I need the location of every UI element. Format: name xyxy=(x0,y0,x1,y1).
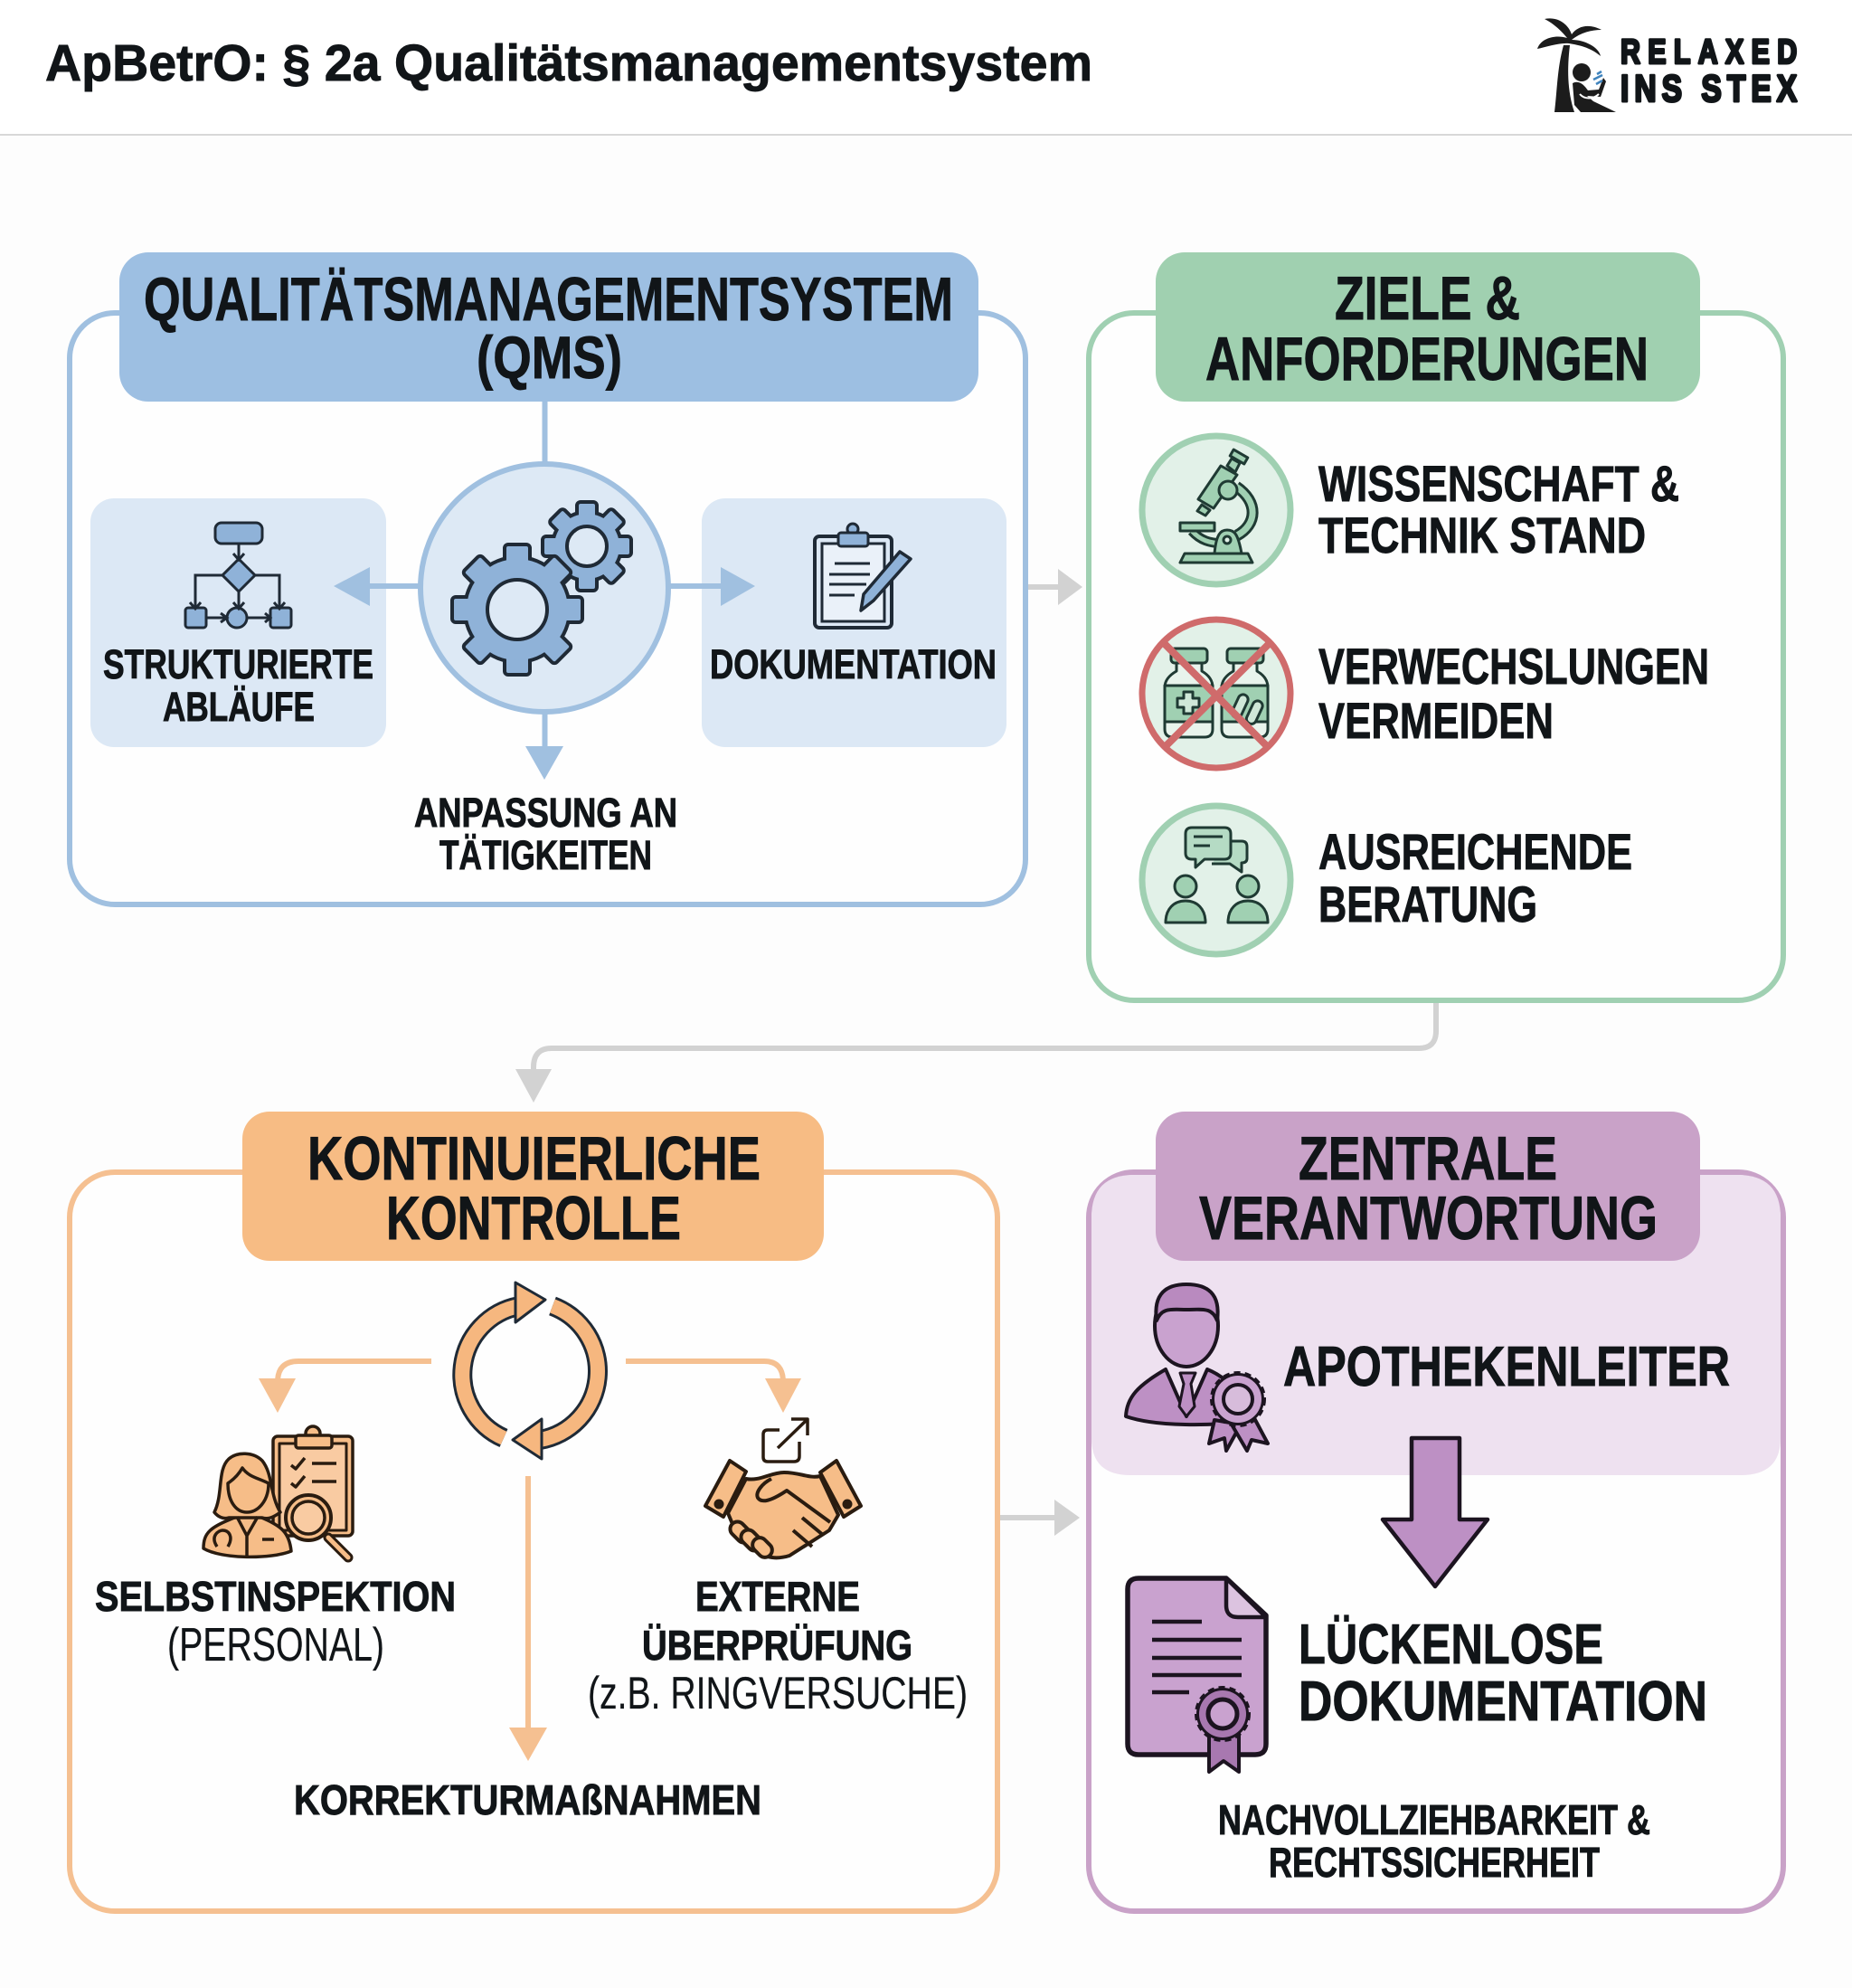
label: Nachvollziehbarkeit: NACHVOLLZIEHBARKEIT & xyxy=(1218,1796,1650,1843)
box: Dokumentation: DOKUMENTATION xyxy=(710,641,997,687)
label: Nachvollziehbarkeit: RECHTSSICHERHEIT xyxy=(1269,1839,1600,1886)
box: Strukturierte Abläufe: ABLÄUFE xyxy=(163,684,315,730)
item: Verwechslungen: VERMEIDEN xyxy=(1318,692,1554,749)
label: Anpassung an Tätigkeiten: ANPASSUNG AN xyxy=(414,790,677,836)
arrow: down xyxy=(1383,1438,1488,1586)
box: Strukturierte Abläufe xyxy=(90,498,386,747)
arrow: Kontrolle to Verantwortung xyxy=(999,1500,1080,1536)
heading: Verantwortung: VERANTWORTUNG xyxy=(1199,1184,1658,1253)
item: Selbstinspektion: SELBSTINSPEKTION xyxy=(95,1573,456,1620)
icon: gears xyxy=(420,464,668,712)
label: Nachvollziehbarkeit xyxy=(1218,1796,1650,1886)
item: Externe Überprüfung: EXTERNE xyxy=(695,1573,860,1620)
icon: cycle arrows xyxy=(462,1283,598,1459)
heading: Ziele xyxy=(1156,252,1700,402)
arrow: to Anpassung xyxy=(525,711,563,780)
panel: QMS xyxy=(70,252,1025,904)
heading: Kontrolle xyxy=(242,1112,824,1261)
heading: Verantwortung xyxy=(1156,1112,1700,1261)
heading: QMS xyxy=(119,252,978,402)
item: Beratung: BERATUNG xyxy=(1318,876,1537,932)
arrow: to Dokumentation xyxy=(669,567,755,606)
panel frame xyxy=(1089,313,1783,1000)
label: Lückenlose Dokumentation: DOKUMENTATION xyxy=(1299,1671,1707,1733)
item: Selbstinspektion xyxy=(95,1573,456,1671)
box: Dokumentation xyxy=(702,498,1006,747)
arrow: QMS to Ziele xyxy=(1028,569,1082,605)
box: Strukturierte Abläufe: STRUKTURIERTE xyxy=(103,641,373,687)
arrow: to Korrekturmaßnahmen xyxy=(509,1476,547,1761)
item: Selbstinspektion: (PERSONAL) xyxy=(167,1619,384,1671)
icon: external handshake xyxy=(705,1419,861,1560)
arrow: to externe Überprüfung xyxy=(626,1361,801,1413)
label: Lückenlose Dokumentation xyxy=(1299,1614,1707,1733)
item: Verwechslungen: VERWECHSLUNGEN xyxy=(1318,638,1709,695)
item: Wissenschaft: WISSENSCHAFT & xyxy=(1318,455,1679,512)
heading: QMS: QUALITÄTSMANAGEMENTSYSTEM xyxy=(144,265,953,334)
logo: Relaxed Ins Stex: RELAXED xyxy=(1620,33,1797,71)
heading: Ziele: ZIELE & xyxy=(1335,264,1520,333)
label: Anpassung an Tätigkeiten xyxy=(414,790,677,878)
label: Apothekenleiter: APOTHEKENLEITER xyxy=(1283,1336,1730,1398)
icon: microscope xyxy=(1142,436,1290,584)
item: Externe Überprüfung: (z.B. RINGVERSUCHE) xyxy=(588,1668,968,1718)
panel frame xyxy=(70,313,1025,904)
item: Wissenschaft xyxy=(1142,436,1679,584)
logo: Relaxed Ins Stex: INS STEX xyxy=(1620,69,1798,110)
band: Apothekenleiter background xyxy=(1091,1175,1781,1475)
panel frame xyxy=(70,1172,997,1911)
item: Beratung: AUSREICHENDE xyxy=(1318,823,1632,880)
panel: Ziele und Anforderungen xyxy=(1089,252,1783,1000)
panel: Zentrale Verantwortung xyxy=(1089,1112,1783,1911)
arrow: Ziele to Kontrolle xyxy=(515,1001,1436,1103)
item: Wissenschaft: TECHNIK STAND xyxy=(1318,506,1646,563)
panel frame xyxy=(1089,1172,1783,1911)
item: Verwechslungen xyxy=(1142,620,1709,768)
icon: certified document xyxy=(1128,1578,1266,1772)
icon: clipboard and pen xyxy=(815,524,911,628)
label: Lückenlose Dokumentation: LÜCKENLOSE xyxy=(1299,1614,1603,1676)
heading: QMS: (QMS) xyxy=(477,324,622,391)
arrow: to Selbstinspektion xyxy=(259,1361,431,1413)
label: Korrekturmaßnahmen: KORREKTURMAßNAHMEN xyxy=(294,1776,761,1823)
item: Externe Überprüfung xyxy=(588,1573,968,1718)
panel: Kontinuierliche Kontrolle xyxy=(70,1112,997,1911)
icon: flowchart xyxy=(185,523,291,628)
icon: pharmacy manager xyxy=(1126,1284,1268,1451)
icon: consultation xyxy=(1142,806,1290,954)
logo: Relaxed Ins Stex xyxy=(1537,18,1798,112)
title: ApBetrO: § 2a Qualitätsmanagementsystem xyxy=(45,34,1092,92)
item: Beratung xyxy=(1142,806,1632,954)
heading: Kontrolle: KONTROLLE xyxy=(386,1184,681,1253)
heading: Kontrolle: KONTINUIERLICHE xyxy=(307,1124,761,1193)
label: Anpassung an Tätigkeiten: TÄTIGKEITEN xyxy=(439,832,652,878)
icon: crossed-out bottles xyxy=(1142,620,1290,768)
heading: Ziele: ANFORDERUNGEN xyxy=(1205,325,1649,393)
item: Externe Überprüfung: ÜBERPRÜFUNG xyxy=(642,1622,912,1669)
arrow: to Strukturierte Abläufe xyxy=(334,567,420,606)
heading: Verantwortung: ZENTRALE xyxy=(1299,1124,1557,1193)
icon: self inspection xyxy=(203,1426,353,1557)
